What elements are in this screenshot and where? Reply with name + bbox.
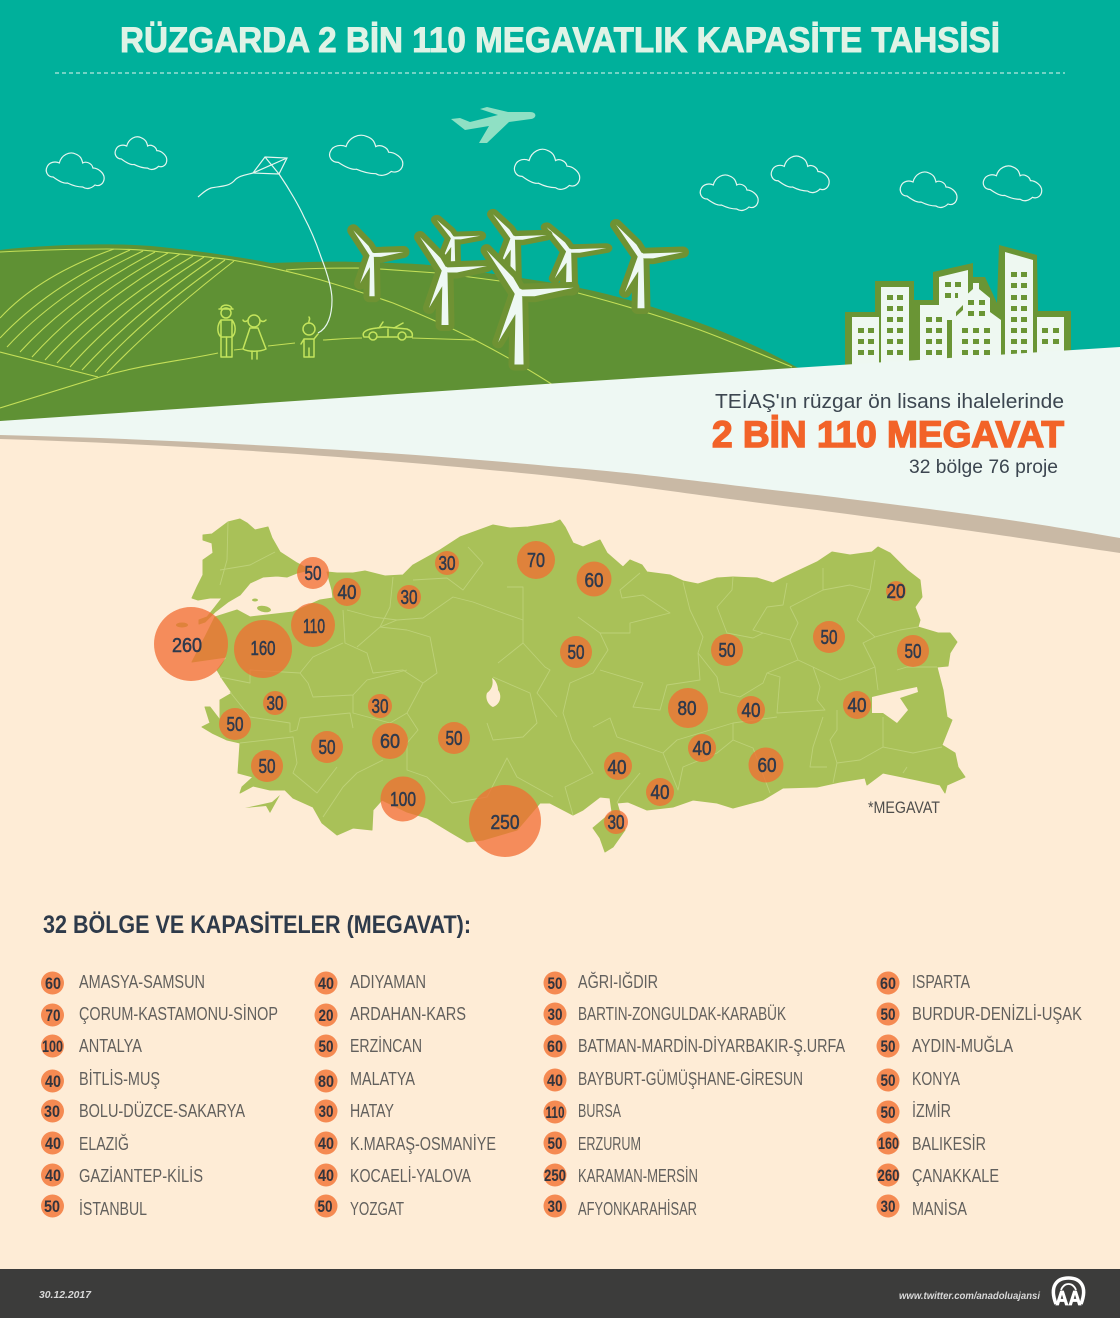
figure: child (301, 317, 318, 357)
illustration: city skyline (845, 245, 1071, 370)
bubble: Karaman-Mersin 250 (469, 785, 541, 857)
illustration: wind turbines (353, 214, 683, 364)
row: Manisa: 30 (880, 1197, 896, 1216)
row: Konya: 50 (880, 1071, 896, 1090)
bubble: Bursa 110: 110 (303, 616, 325, 638)
turbine 5 (486, 250, 574, 364)
bubble: Ağrı-Iğdır 50: 50 (904, 641, 922, 663)
row: Balıkesir: 160 (878, 1134, 899, 1153)
logo: AA: AA (1056, 1288, 1082, 1310)
row: Ardahan-Kars (314, 1004, 466, 1026)
row: Çanakkale: 260 (878, 1166, 900, 1185)
row: Afyonkarahisar: AFYONKARAHİSAR (578, 1199, 697, 1219)
row: Batman-Mardin-Diyarbakır-Ş.Urfa: BATMAN-MARDİN-DİYARBAKIR-Ş.URFA (578, 1036, 845, 1056)
row: Bartın-Zonguldak-Karabük: BARTIN-ZONGULDAK-KARABÜK (578, 1004, 786, 1024)
bubble: Bursa 110 (291, 603, 335, 647)
row: Yozgat: 50 (318, 1197, 332, 1216)
map unit note: *MEGAVAT (868, 798, 940, 817)
row: İstanbul: İSTANBUL (79, 1199, 147, 1219)
bubble: Yozgat 50: 50 (568, 642, 584, 664)
row: Kocaeli-Yalova: KOCAELİ-YALOVA (350, 1166, 471, 1186)
row: Amasya-Samsun: 60 (45, 974, 61, 993)
row: Ardahan-Kars: ARDAHAN-KARS (350, 1004, 466, 1024)
icon: convertible car (363, 322, 412, 340)
big number headline: 2 BİN 110 MEGAVAT (712, 414, 1064, 455)
lake: Van (872, 687, 918, 723)
row: Erzincan: 50 (318, 1037, 334, 1056)
row: Burdur-Denizli-Uşak (876, 1002, 1082, 1026)
row: Çorum-Kastamonu-Sinop: 70 (46, 1006, 60, 1025)
row: Aydın-Muğla: AYDIN-MUĞLA (912, 1035, 1013, 1056)
bubble: Elazığ 40 (737, 696, 765, 724)
bubble: Bitlis-Muş 40: 40 (848, 695, 866, 717)
row: Aydın-Muğla: 50 (880, 1037, 896, 1056)
bubble: Kocaeli-Yalova 40: 40 (338, 582, 356, 604)
row: Kocaeli-Yalova: 40 (318, 1166, 334, 1185)
map land: Datça peninsula (245, 795, 280, 813)
row: Bolu-Düzce-Sakarya (41, 1100, 245, 1122)
row: Hatay: 30 (318, 1102, 334, 1121)
turbine 2 (437, 220, 480, 268)
row: Bartın-Zonguldak-Karabük: 30 (548, 1005, 562, 1024)
row: Amasya-Samsun: AMASYA-SAMSUN (79, 972, 205, 992)
row: Burdur-Denizli-Uşak: BURDUR-DENİZLİ-UŞAK (912, 1004, 1082, 1024)
bubble: Burdur-Denizli-Uşak 50: 50 (318, 737, 336, 759)
row: Afyonkarahisar (544, 1194, 697, 1219)
row: Erzurum: ERZURUM (578, 1134, 641, 1154)
bubble: İstanbul 50: 50 (304, 563, 322, 585)
bubble: Karaman-Mersin 250: 250 (490, 812, 520, 834)
bubble: Ağrı-Iğdır 50 (897, 635, 929, 667)
row: Kocaeli-Yalova (314, 1164, 471, 1186)
row: Adıyaman (314, 972, 426, 994)
turbine 7 (616, 225, 683, 308)
bubble: Isparta 60 (372, 723, 408, 759)
row: Bayburt-Gümüşhane-Giresun (544, 1068, 803, 1092)
bubble: Burdur-Denizli-Uşak 50 (311, 731, 343, 763)
bubble: Erzincan 50 (711, 634, 743, 666)
bubble: Malatya 80 (668, 688, 708, 728)
brown curved band (0, 420, 1120, 553)
bubble: Çorum-Kastamonu-Sinop 70: 70 (527, 550, 545, 572)
row: Adıyaman: 40 (318, 974, 334, 993)
row: Elazığ: ELAZIĞ (79, 1133, 129, 1154)
row: Aydın-Muğla (876, 1034, 1013, 1058)
footer (0, 1269, 1120, 1318)
row: Gaziantep-Kilis (41, 1164, 203, 1186)
bubble: Adıyaman 40 (688, 734, 716, 762)
turbine 3 (420, 237, 487, 325)
bubble: Manisa 30: 30 (266, 693, 284, 715)
illustration: kite and string (198, 157, 332, 333)
logo: AA (1053, 1278, 1084, 1310)
bubble: Aydın-Muğla 50: 50 (258, 756, 276, 778)
row: Gaziantep-Kilis: 40 (45, 1166, 61, 1185)
row: Hatay (314, 1100, 394, 1122)
panel: lower cream background (0, 425, 1120, 1270)
row: İzmir (876, 1100, 951, 1124)
bubble: Ardahan-Kars 20: 20 (886, 581, 906, 603)
map of Turkey (154, 519, 965, 857)
bubble: Erzurum 50 (813, 621, 845, 653)
map land: Anatolia (192, 520, 965, 852)
row: Afyonkarahisar: 30 (548, 1197, 562, 1216)
row: Ağrı-Iğdır: 50 (548, 974, 562, 993)
legend column 4 (876, 972, 1082, 1219)
bubble: Yozgat 50 (560, 636, 592, 668)
panel: sky background (0, 0, 1120, 440)
row: Isparta: ISPARTA (912, 972, 970, 992)
row: K.Maraş-Osmaniye (314, 1132, 496, 1154)
turbine 1 (353, 230, 404, 296)
province borders (220, 522, 942, 817)
row: Ağrı-Iğdır (544, 971, 658, 994)
row: Balıkesir (876, 1132, 986, 1154)
row: Manisa (876, 1194, 967, 1219)
cloud 5 (700, 175, 758, 210)
city outline (845, 245, 1071, 370)
cloud 8 (983, 166, 1042, 201)
bubble: K.Maraş-Osmaniye 40: 40 (608, 757, 626, 779)
bubble: Batman-Mardin-Diyarbakır-Ş.Urfa 60 (748, 748, 784, 782)
figure: girl (243, 315, 266, 359)
row: Karaman-Mersin: 250 (544, 1166, 566, 1185)
row: Ardahan-Kars: 20 (318, 1006, 334, 1025)
legend heading: 32 BÖLGE VE KAPASİTELER (MEGAVAT): (43, 910, 471, 939)
legend column 3 (544, 971, 845, 1219)
row: Elazığ: 40 (45, 1134, 61, 1153)
buildings (852, 252, 1064, 367)
bubble: Erzurum 50: 50 (820, 627, 838, 649)
row: İzmir: 50 (880, 1103, 896, 1122)
cloud 1 (46, 153, 104, 188)
row: Karaman-Mersin: KARAMAN-MERSİN (578, 1166, 698, 1186)
row: Bitlis-Muş (41, 1069, 160, 1092)
row: Bursa (544, 1100, 621, 1124)
row: Yozgat (314, 1194, 404, 1219)
panel: mint summary strip (0, 347, 1120, 538)
row: Hatay: HATAY (350, 1101, 394, 1121)
hill contour and field lines (0, 249, 792, 408)
source URL: www.twitter.com/anadoluajansi (899, 1290, 1041, 1302)
summary line 3: 32 bölge 76 proje (909, 457, 1058, 478)
bubble: Çanakkale 260 (154, 607, 228, 681)
cloud 2 (115, 137, 167, 169)
row: K.Maraş-Osmaniye: K.MARAŞ-OSMANİYE (350, 1134, 496, 1154)
summary line 1: TEİAŞ'ın rüzgar ön lisans ihalelerinde (715, 390, 1064, 413)
row: Erzincan: ERZİNCAN (350, 1036, 422, 1056)
row: Balıkesir: BALIKESİR (912, 1134, 986, 1154)
bubble: İstanbul 50 (297, 557, 329, 589)
bubble: Gaziantep-Kilis 40: 40 (650, 782, 670, 804)
row: Erzincan (314, 1034, 422, 1058)
row: Bayburt-Gümüşhane-Giresun: BAYBURT-GÜMÜŞHANE-GİRESUN (578, 1069, 803, 1089)
illustration: green hills (0, 244, 800, 430)
bubble: Çanakkale 260: 260 (172, 635, 202, 657)
row: Antalya: 100 (42, 1037, 63, 1056)
bubble: Kocaeli-Yalova 40 (333, 578, 361, 606)
row: Manisa: MANİSA (912, 1199, 967, 1219)
row: Konya (876, 1068, 960, 1092)
date: 30.12.2017 (39, 1289, 92, 1301)
legend column 1 (41, 972, 278, 1219)
row: Bayburt-Gümüşhane-Giresun: 40 (547, 1071, 563, 1090)
row: Antalya: ANTALYA (79, 1036, 142, 1056)
summary text block (712, 390, 1064, 478)
bubble: Malatya 80: 80 (678, 698, 696, 720)
bubble: Amasya-Samsun 60: 60 (584, 570, 604, 592)
row: Adıyaman: ADIYAMAN (350, 972, 426, 992)
bubble: İzmir 50 (219, 708, 251, 740)
bubble: Batman-Mardin-Diyarbakır-Ş.Urfa 60: 60 (758, 755, 776, 777)
row: Batman-Mardin-Diyarbakır-Ş.Urfa: 60 (547, 1037, 563, 1056)
row: Elazığ (41, 1132, 129, 1154)
row: Bolu-Düzce-Sakarya: BOLU-DÜZCE-SAKARYA (79, 1101, 245, 1121)
bubble: Adıyaman 40: 40 (692, 738, 712, 760)
row: Bolu-Düzce-Sakarya: 30 (44, 1102, 60, 1121)
map bubbles (154, 541, 929, 857)
row: Konya: KONYA (912, 1069, 960, 1089)
turbine 6 (547, 227, 606, 291)
bubble: K.Maraş-Osmaniye 40 (604, 752, 632, 780)
row: Malatya (314, 1069, 415, 1092)
title: RÜZGARDA 2 BİN 110 MEGAVATLIK KAPASİTE TAHSİSİ (120, 21, 1000, 60)
bubble: Çorum-Kastamonu-Sinop 70 (517, 541, 555, 579)
row: Malatya: 80 (318, 1072, 334, 1091)
bubble: Erzincan 50: 50 (718, 640, 736, 662)
illustration: people and car (218, 305, 412, 359)
row: Isparta: 60 (880, 974, 896, 993)
bubble: İzmir 50: 50 (226, 714, 244, 736)
bubble: Bitlis-Muş 40 (843, 691, 871, 719)
lake: Tuz (486, 678, 500, 707)
map land: Thrace (192, 519, 310, 624)
row: Malatya: MALATYA (350, 1069, 415, 1089)
bubble: Gaziantep-Kilis 40 (646, 778, 674, 806)
legend column 2 (314, 972, 496, 1219)
row: İstanbul: 50 (44, 1197, 60, 1216)
row: Erzurum (544, 1132, 641, 1154)
row: Bitlis-Muş: 40 (45, 1072, 61, 1091)
bubble: Afyonkarahisar 30: 30 (372, 696, 388, 718)
bubble: Bartın-Zonguldak-Karabük 30: 30 (438, 553, 456, 575)
row: Isparta (876, 972, 970, 994)
row: Bursa: BURSA (578, 1101, 621, 1121)
bubble: Antalya 100: 100 (390, 789, 416, 811)
row: İzmir: İZMİR (912, 1101, 951, 1121)
row: Çorum-Kastamonu-Sinop (41, 1004, 278, 1026)
cloud 4 (514, 149, 580, 189)
row: Bursa: 110 (546, 1103, 564, 1122)
row: Yozgat: YOZGAT (350, 1199, 404, 1219)
bubble: Aydın-Muğla 50 (251, 750, 283, 782)
bubble: Konya 50 (438, 722, 470, 754)
bubble: Antalya 100 (380, 776, 426, 822)
row: Karaman-Mersin (544, 1164, 698, 1186)
bubble: Isparta 60: 60 (380, 731, 400, 753)
row: Bartın-Zonguldak-Karabük (544, 1002, 786, 1026)
clouds (46, 135, 1042, 210)
cloud 6 (771, 156, 829, 193)
icon: airplane (451, 107, 535, 143)
cloud 7 (900, 172, 957, 207)
row: Bitlis-Muş: BİTLİS-MUŞ (79, 1069, 160, 1089)
row: Ağrı-Iğdır: AĞRI-IĞDIR (578, 971, 658, 992)
map land: Marmara and Aegean islands (176, 598, 271, 628)
row: Amasya-Samsun (41, 972, 205, 994)
row: Antalya (41, 1034, 142, 1058)
bubble: Hatay 30: 30 (608, 812, 624, 834)
bubble: Elazığ 40: 40 (742, 700, 760, 722)
bubble: Balıkesir 160: 160 (250, 638, 276, 660)
cloud 3 (330, 135, 403, 175)
turbine 4 (493, 214, 547, 278)
bubble: Balıkesir 160 (234, 620, 292, 678)
row: Çanakkale (876, 1164, 999, 1186)
row: Erzurum: 50 (548, 1134, 562, 1153)
row: Gaziantep-Kilis: GAZİANTEP-KİLİS (79, 1166, 203, 1186)
figure: father (218, 305, 235, 357)
bubble: Amasya-Samsun 60 (576, 562, 612, 596)
row: Çorum-Kastamonu-Sinop: ÇORUM-KASTAMONU-SİNOP (79, 1004, 278, 1024)
bubble: Bolu-Düzce-Sakarya 30: 30 (400, 587, 418, 609)
footer bar (0, 1269, 1120, 1318)
bubble: Konya 50: 50 (446, 728, 462, 750)
row: İstanbul (41, 1194, 147, 1219)
row: Batman-Mardin-Diyarbakır-Ş.Urfa (544, 1034, 845, 1058)
row: K.Maraş-Osmaniye: 40 (318, 1134, 334, 1153)
row: Burdur-Denizli-Uşak: 50 (880, 1005, 896, 1024)
windows (858, 272, 1059, 355)
row: Çanakkale: ÇANAKKALE (912, 1166, 999, 1186)
